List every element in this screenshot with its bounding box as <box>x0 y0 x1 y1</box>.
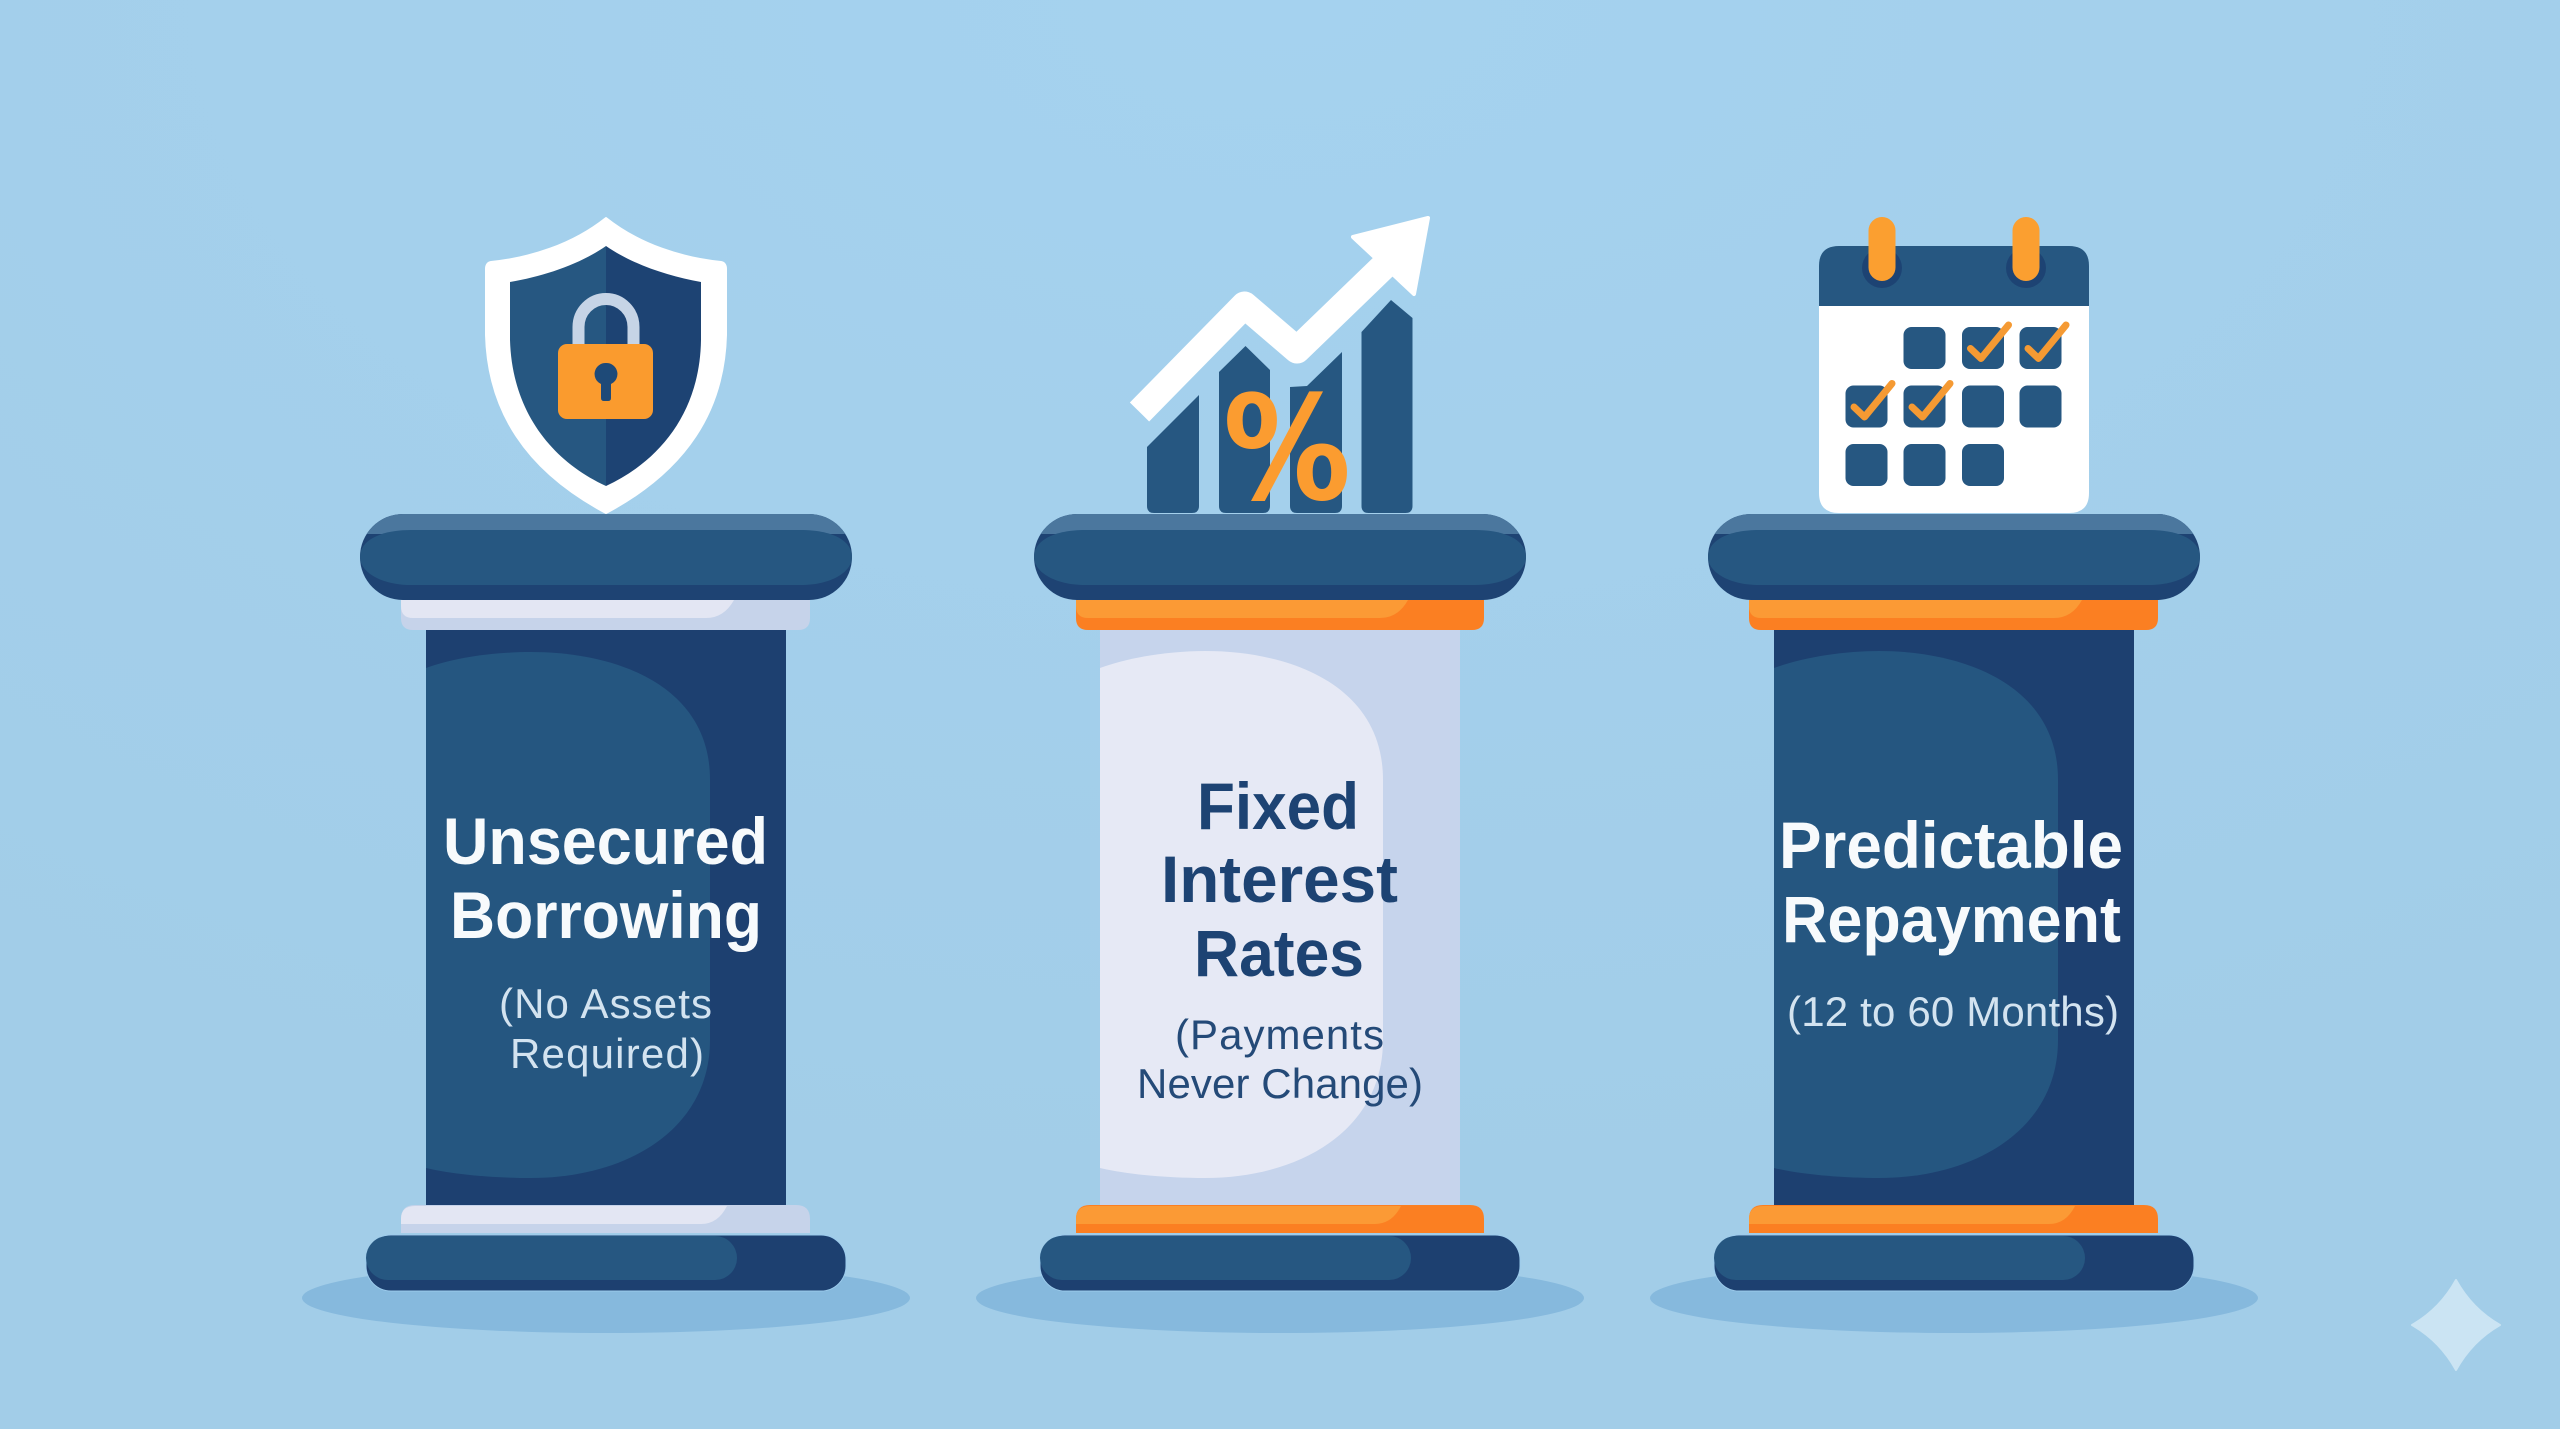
subheading: (No Assets <box>499 980 712 1027</box>
percent sign: % <box>1223 365 1351 534</box>
bar 4 <box>1362 300 1412 513</box>
calendar page <box>1819 300 2089 513</box>
icon: calendar with checkmarks <box>1819 217 2089 513</box>
lock body <box>558 344 653 419</box>
lower neck <box>1749 1205 2158 1233</box>
heading <box>443 804 768 952</box>
capital <box>360 514 852 600</box>
top neck <box>401 600 810 630</box>
heading: Rates <box>1194 916 1364 990</box>
pillar: Unsecured Borrowing <box>302 514 910 1333</box>
base <box>1040 1235 1520 1291</box>
icon: rising bar chart with percent <box>1140 218 1428 534</box>
column highlight <box>1774 651 2058 1178</box>
pillar column <box>1100 630 1460 1205</box>
capital <box>1034 514 1526 600</box>
top neck <box>1076 600 1484 630</box>
binder rings <box>1868 217 2040 281</box>
checkmarks <box>1854 325 2066 417</box>
base <box>366 1235 846 1291</box>
top neck <box>1749 600 2158 630</box>
heading: Fixed <box>1197 769 1359 843</box>
lower neck <box>1076 1205 1484 1233</box>
subheading <box>499 980 712 1077</box>
column highlight <box>426 652 710 1178</box>
growth arrow <box>1140 218 1428 412</box>
infographic canvas <box>302 216 2501 1371</box>
subheading: Required) <box>510 1030 704 1077</box>
ground shadow <box>302 1263 910 1333</box>
heading: Interest <box>1161 842 1398 916</box>
sparkle watermark <box>2412 1280 2500 1370</box>
shield right half <box>606 246 701 486</box>
bar 1 <box>1147 395 1199 513</box>
ground shadow <box>1650 1263 2258 1333</box>
shield left half <box>510 246 606 486</box>
pillar column <box>1774 630 2134 1205</box>
bar 2 <box>1219 346 1270 513</box>
subheading: Never Change) <box>1137 1060 1423 1107</box>
shield outer <box>486 218 726 513</box>
column highlight <box>1100 651 1383 1178</box>
capital <box>1708 514 2200 600</box>
heading: Borrowing <box>450 878 762 952</box>
keyhole <box>595 363 617 401</box>
calendar header <box>1819 246 2089 306</box>
subheading: (12 to 60 Months) <box>1787 988 2119 1035</box>
subheading: (Payments <box>1175 1011 1384 1058</box>
ring holes <box>1862 248 2046 288</box>
icon: shield with padlock <box>486 218 726 513</box>
lower neck <box>401 1205 810 1233</box>
pillar: Predictable Repayment <box>1650 514 2258 1333</box>
lock shackle <box>578 299 634 347</box>
ground shadow <box>976 1263 1584 1333</box>
bar 3 <box>1290 352 1342 513</box>
subheading <box>1137 1011 1423 1107</box>
pillar column <box>426 630 786 1205</box>
heading: Repayment <box>1782 882 2121 956</box>
heading: Unsecured <box>443 804 768 878</box>
heading <box>1161 769 1398 990</box>
pillar: Fixed Interest Rates <box>976 514 1584 1333</box>
base <box>1714 1235 2194 1291</box>
day cells <box>1846 327 2062 486</box>
heading: Predictable <box>1779 808 2123 882</box>
heading <box>1779 808 2123 956</box>
